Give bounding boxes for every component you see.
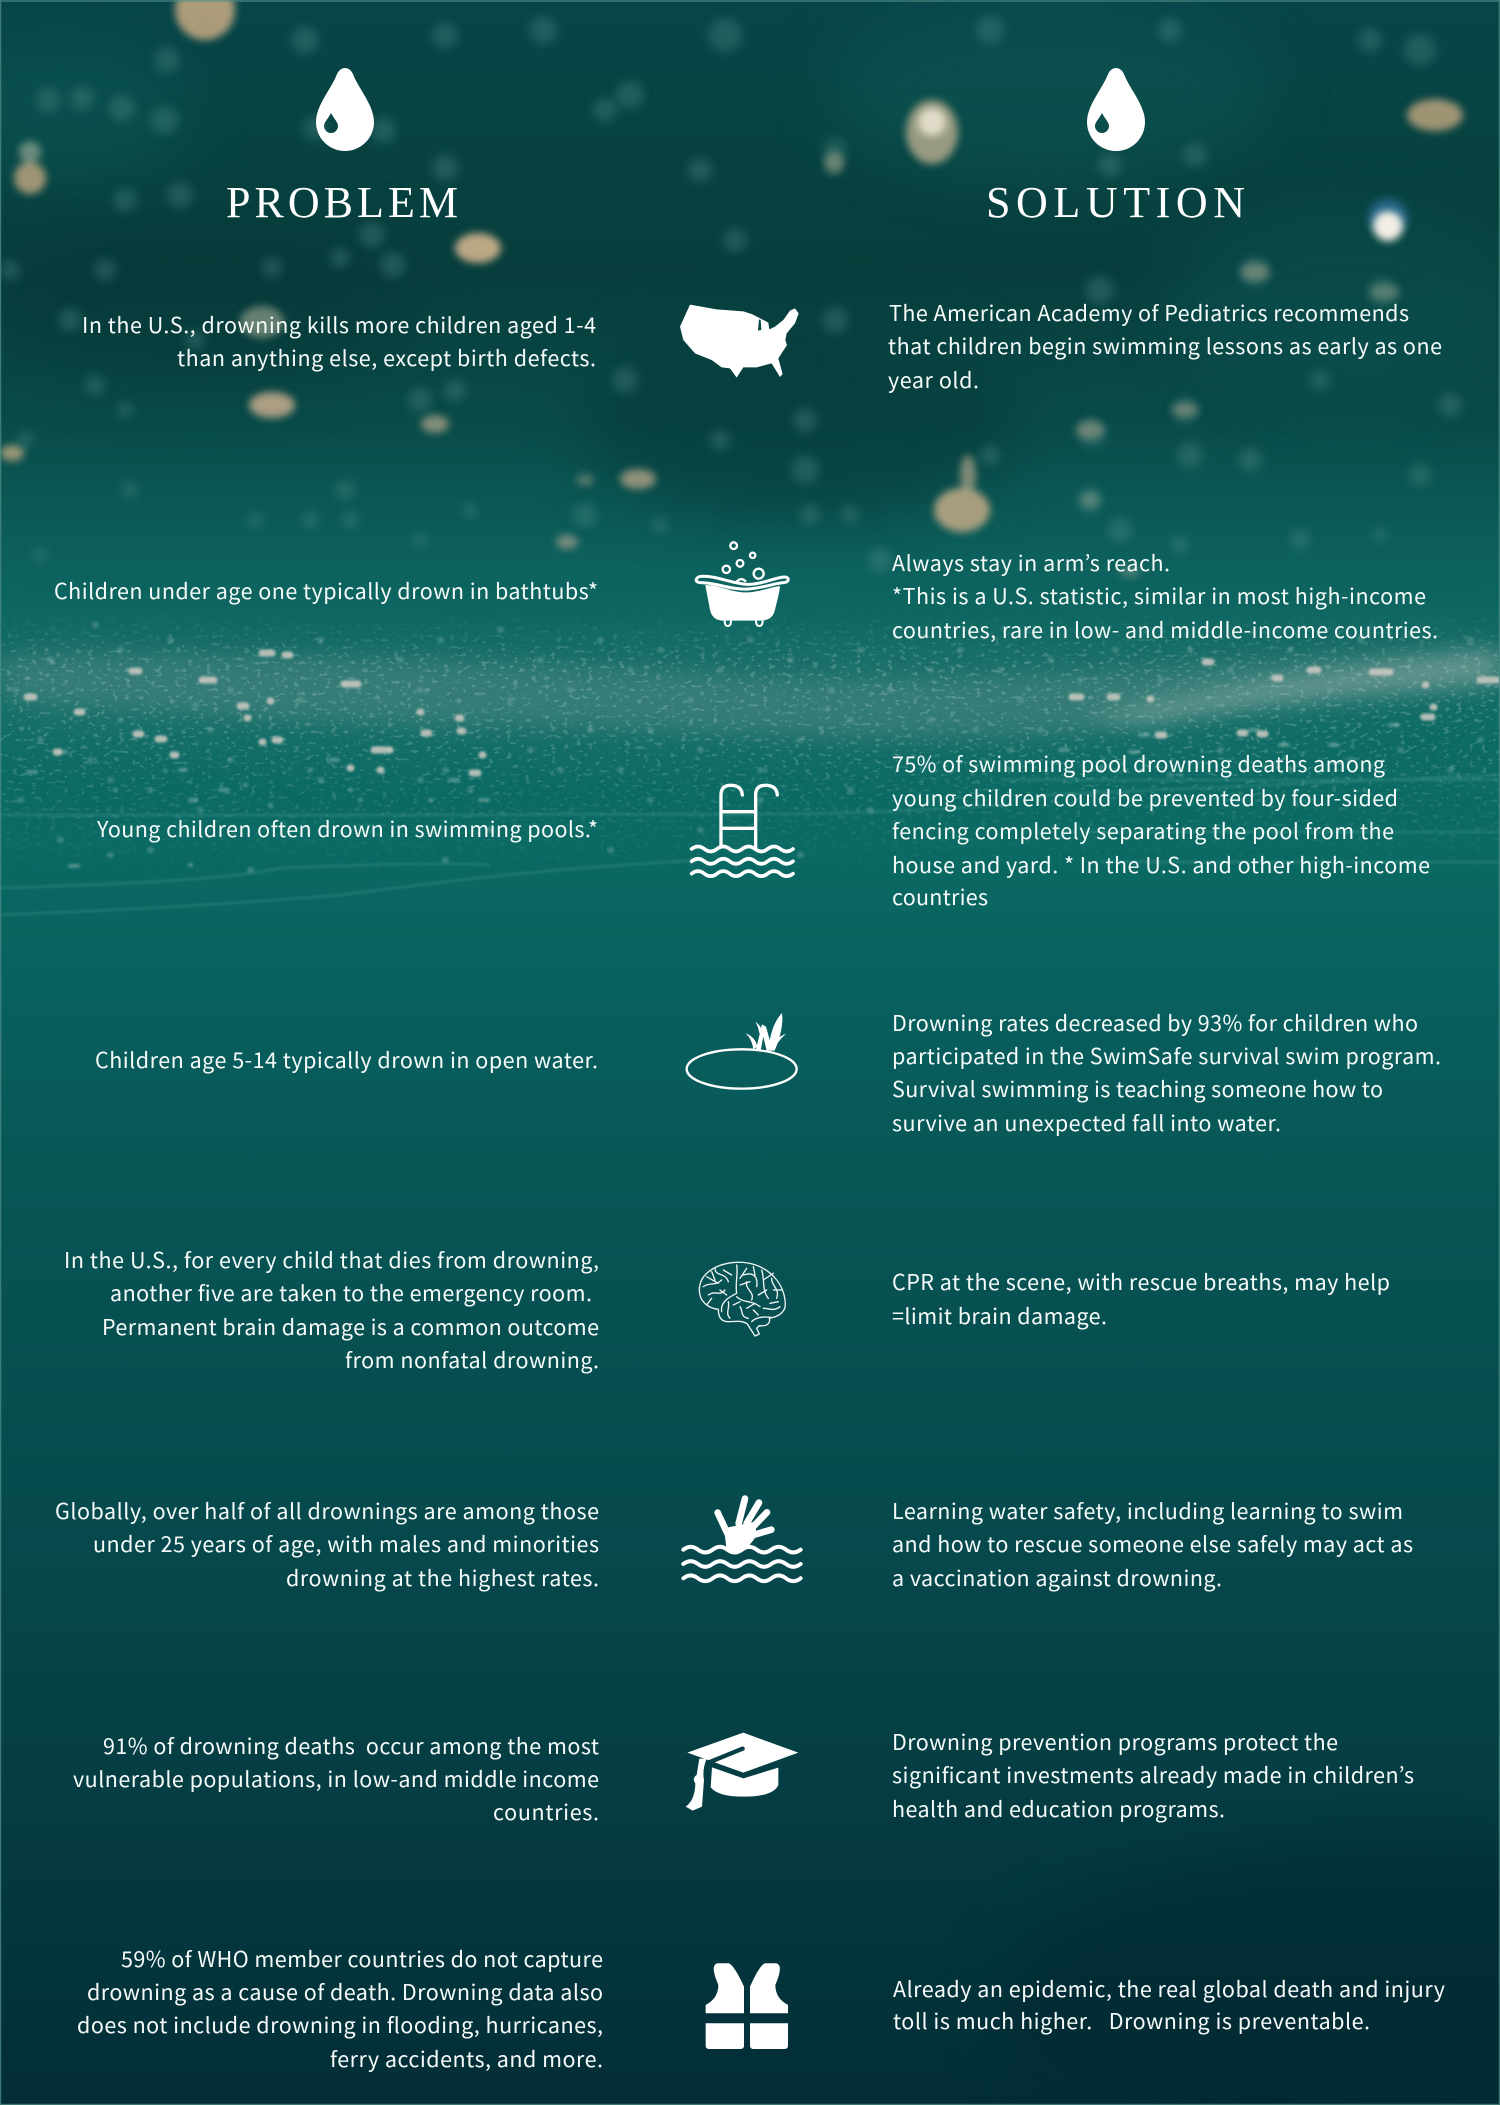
panel: problem column bbox=[54, 68, 603, 2074]
light band bbox=[0, 645, 1500, 738]
problem text: vulnerable populations: vulnerable populations, in low-and middle income bbox=[73, 1763, 599, 1794]
solution text: swim lessons: year old. bbox=[888, 364, 979, 395]
solution text: fencing: 75% of swimming pool drowning deaths among bbox=[892, 748, 1385, 779]
solution text: arm's reach bbox=[892, 547, 1438, 645]
solution text: CPR: CPR at the scene, with rescue breaths, may help bbox=[892, 1266, 1390, 1297]
solution text: epidemic: toll is much higher. Drowning is preventable. bbox=[893, 2005, 1370, 2036]
solution text: arm's reach: countries, rare in low- and middle-income countries. bbox=[892, 614, 1438, 645]
solution text: CPR bbox=[892, 1266, 1390, 1331]
solution text: survival swim bbox=[892, 1007, 1441, 1138]
solution text: prevention programs: significant investments already made in children’s bbox=[892, 1759, 1414, 1790]
solution text: prevention programs: health and education programs. bbox=[892, 1793, 1225, 1824]
problem text: brain damage: Permanent brain damage is a common outcome bbox=[102, 1311, 599, 1342]
problem text: missing data bbox=[77, 1943, 603, 2074]
problem text: bathtubs: Children under age one typically drown in bathtubs* bbox=[54, 575, 598, 606]
heading: problem: PROBLEM bbox=[226, 178, 458, 227]
problem text: global ages: drowning at the highest rates. bbox=[286, 1562, 599, 1593]
bokeh faint bbox=[0, 16, 1462, 572]
problem text: vulnerable populations bbox=[73, 1730, 599, 1827]
problem text: leading cause bbox=[82, 309, 596, 373]
problem text: missing data: does not include drowning in flooding, hurricanes, bbox=[77, 2009, 603, 2040]
problem text: missing data: drowning as a cause of death. Drowning data also bbox=[87, 1976, 603, 2007]
icon: pond with reeds bbox=[687, 1013, 797, 1089]
bokeh warm bbox=[0, 0, 1463, 578]
icon: brain bbox=[699, 1262, 785, 1336]
solution text: survival swim: Survival swimming is teaching someone how to bbox=[892, 1073, 1383, 1104]
problem text: missing data: ferry accidents, and more. bbox=[330, 2043, 603, 2074]
solution text: swim lessons bbox=[888, 297, 1442, 395]
problem text: vulnerable populations: 91% of drowning deaths occur among the most bbox=[103, 1730, 599, 1761]
icon: pool ladder bbox=[692, 785, 793, 876]
solution text: arm's reach: *This is a U.S. statistic, similar in most high-income bbox=[892, 580, 1426, 611]
problem text: global ages: under 25 years of age, with males and minorities bbox=[93, 1528, 599, 1559]
icon: hand in waves bbox=[683, 1499, 801, 1581]
ripple lines bbox=[0, 775, 1500, 915]
problem text: global ages bbox=[55, 1495, 599, 1593]
problem text: global ages: Globally, over half of all drownings are among those bbox=[55, 1495, 599, 1526]
icon: USA map bbox=[680, 305, 799, 378]
speckles bbox=[15, 625, 1498, 870]
icon: bathtub bbox=[696, 542, 788, 626]
problem text: leading cause: In the U.S., drowning kills more children aged 1-4 bbox=[82, 309, 596, 340]
panel: icon column bbox=[680, 305, 801, 2049]
solution text: epidemic bbox=[893, 1973, 1445, 2036]
icon: graduation cap bbox=[686, 1733, 798, 1811]
problem text: open water: Children age 5-14 typically drown in open water. bbox=[95, 1044, 598, 1075]
problem text: brain damage: In the U.S., for every child that dies from drowning, bbox=[64, 1244, 599, 1275]
solution text: arm's reach: Always stay in arm’s reach. bbox=[892, 547, 1170, 578]
solution text: survival swim: Drowning rates decreased by 93% for children who bbox=[892, 1007, 1418, 1038]
solution text: prevention programs: Drowning prevention programs protect the bbox=[892, 1726, 1338, 1757]
problem text: vulnerable populations: countries. bbox=[493, 1796, 599, 1827]
solution text: survival swim: participated in the SwimSafe survival swim program. bbox=[892, 1040, 1441, 1071]
solution text: water safety: Learning water safety, including learning to swim bbox=[892, 1495, 1403, 1526]
problem text: swimming pools: Young children often drown in swimming pools.* bbox=[96, 813, 598, 844]
panel: solution column bbox=[888, 68, 1445, 2036]
solution text: prevention programs bbox=[892, 1726, 1414, 1824]
solution text: fencing: house and yard. * In the U.S. and other high-income bbox=[892, 849, 1430, 880]
problem text: brain damage bbox=[64, 1244, 599, 1375]
solution text: fencing: countries bbox=[892, 881, 988, 912]
speckle texture bbox=[0, 620, 1500, 851]
solution text: epidemic: Already an epidemic, the real global death and injury bbox=[893, 1973, 1445, 2004]
solution text: water safety: and how to rescue someone else safely may act as bbox=[892, 1528, 1413, 1559]
solution text: fencing: fencing completely separating the pool from the bbox=[892, 815, 1394, 846]
icon: water drop (problem) bbox=[316, 68, 374, 151]
solution text: fencing: young children could be prevented by four-sided bbox=[892, 782, 1398, 813]
solution text: water safety bbox=[892, 1495, 1413, 1593]
solution text: water safety: a vaccination against drowning. bbox=[892, 1562, 1222, 1593]
problem text: brain damage: from nonfatal drowning. bbox=[345, 1344, 599, 1375]
solution text: survival swim: survive an unexpected fall into water. bbox=[892, 1107, 1281, 1138]
problem text: leading cause: than anything else, except birth defects. bbox=[177, 342, 596, 373]
solution text: CPR: =limit brain damage. bbox=[892, 1300, 1107, 1331]
problem text: brain damage: another five are taken to the emergency room. bbox=[110, 1277, 592, 1308]
heading: solution: SOLUTION bbox=[986, 178, 1245, 227]
icon: life vest bbox=[706, 1963, 788, 2049]
solution text: fencing bbox=[892, 748, 1430, 912]
problem text: missing data: 59% of WHO member countries do not capture bbox=[121, 1943, 603, 1974]
solution text: swim lessons: that children begin swimming lessons as early as one bbox=[888, 330, 1442, 361]
solution text: swim lessons: The American Academy of Pediatrics recommends bbox=[889, 297, 1409, 328]
icon: water drop (solution) bbox=[1087, 68, 1145, 151]
